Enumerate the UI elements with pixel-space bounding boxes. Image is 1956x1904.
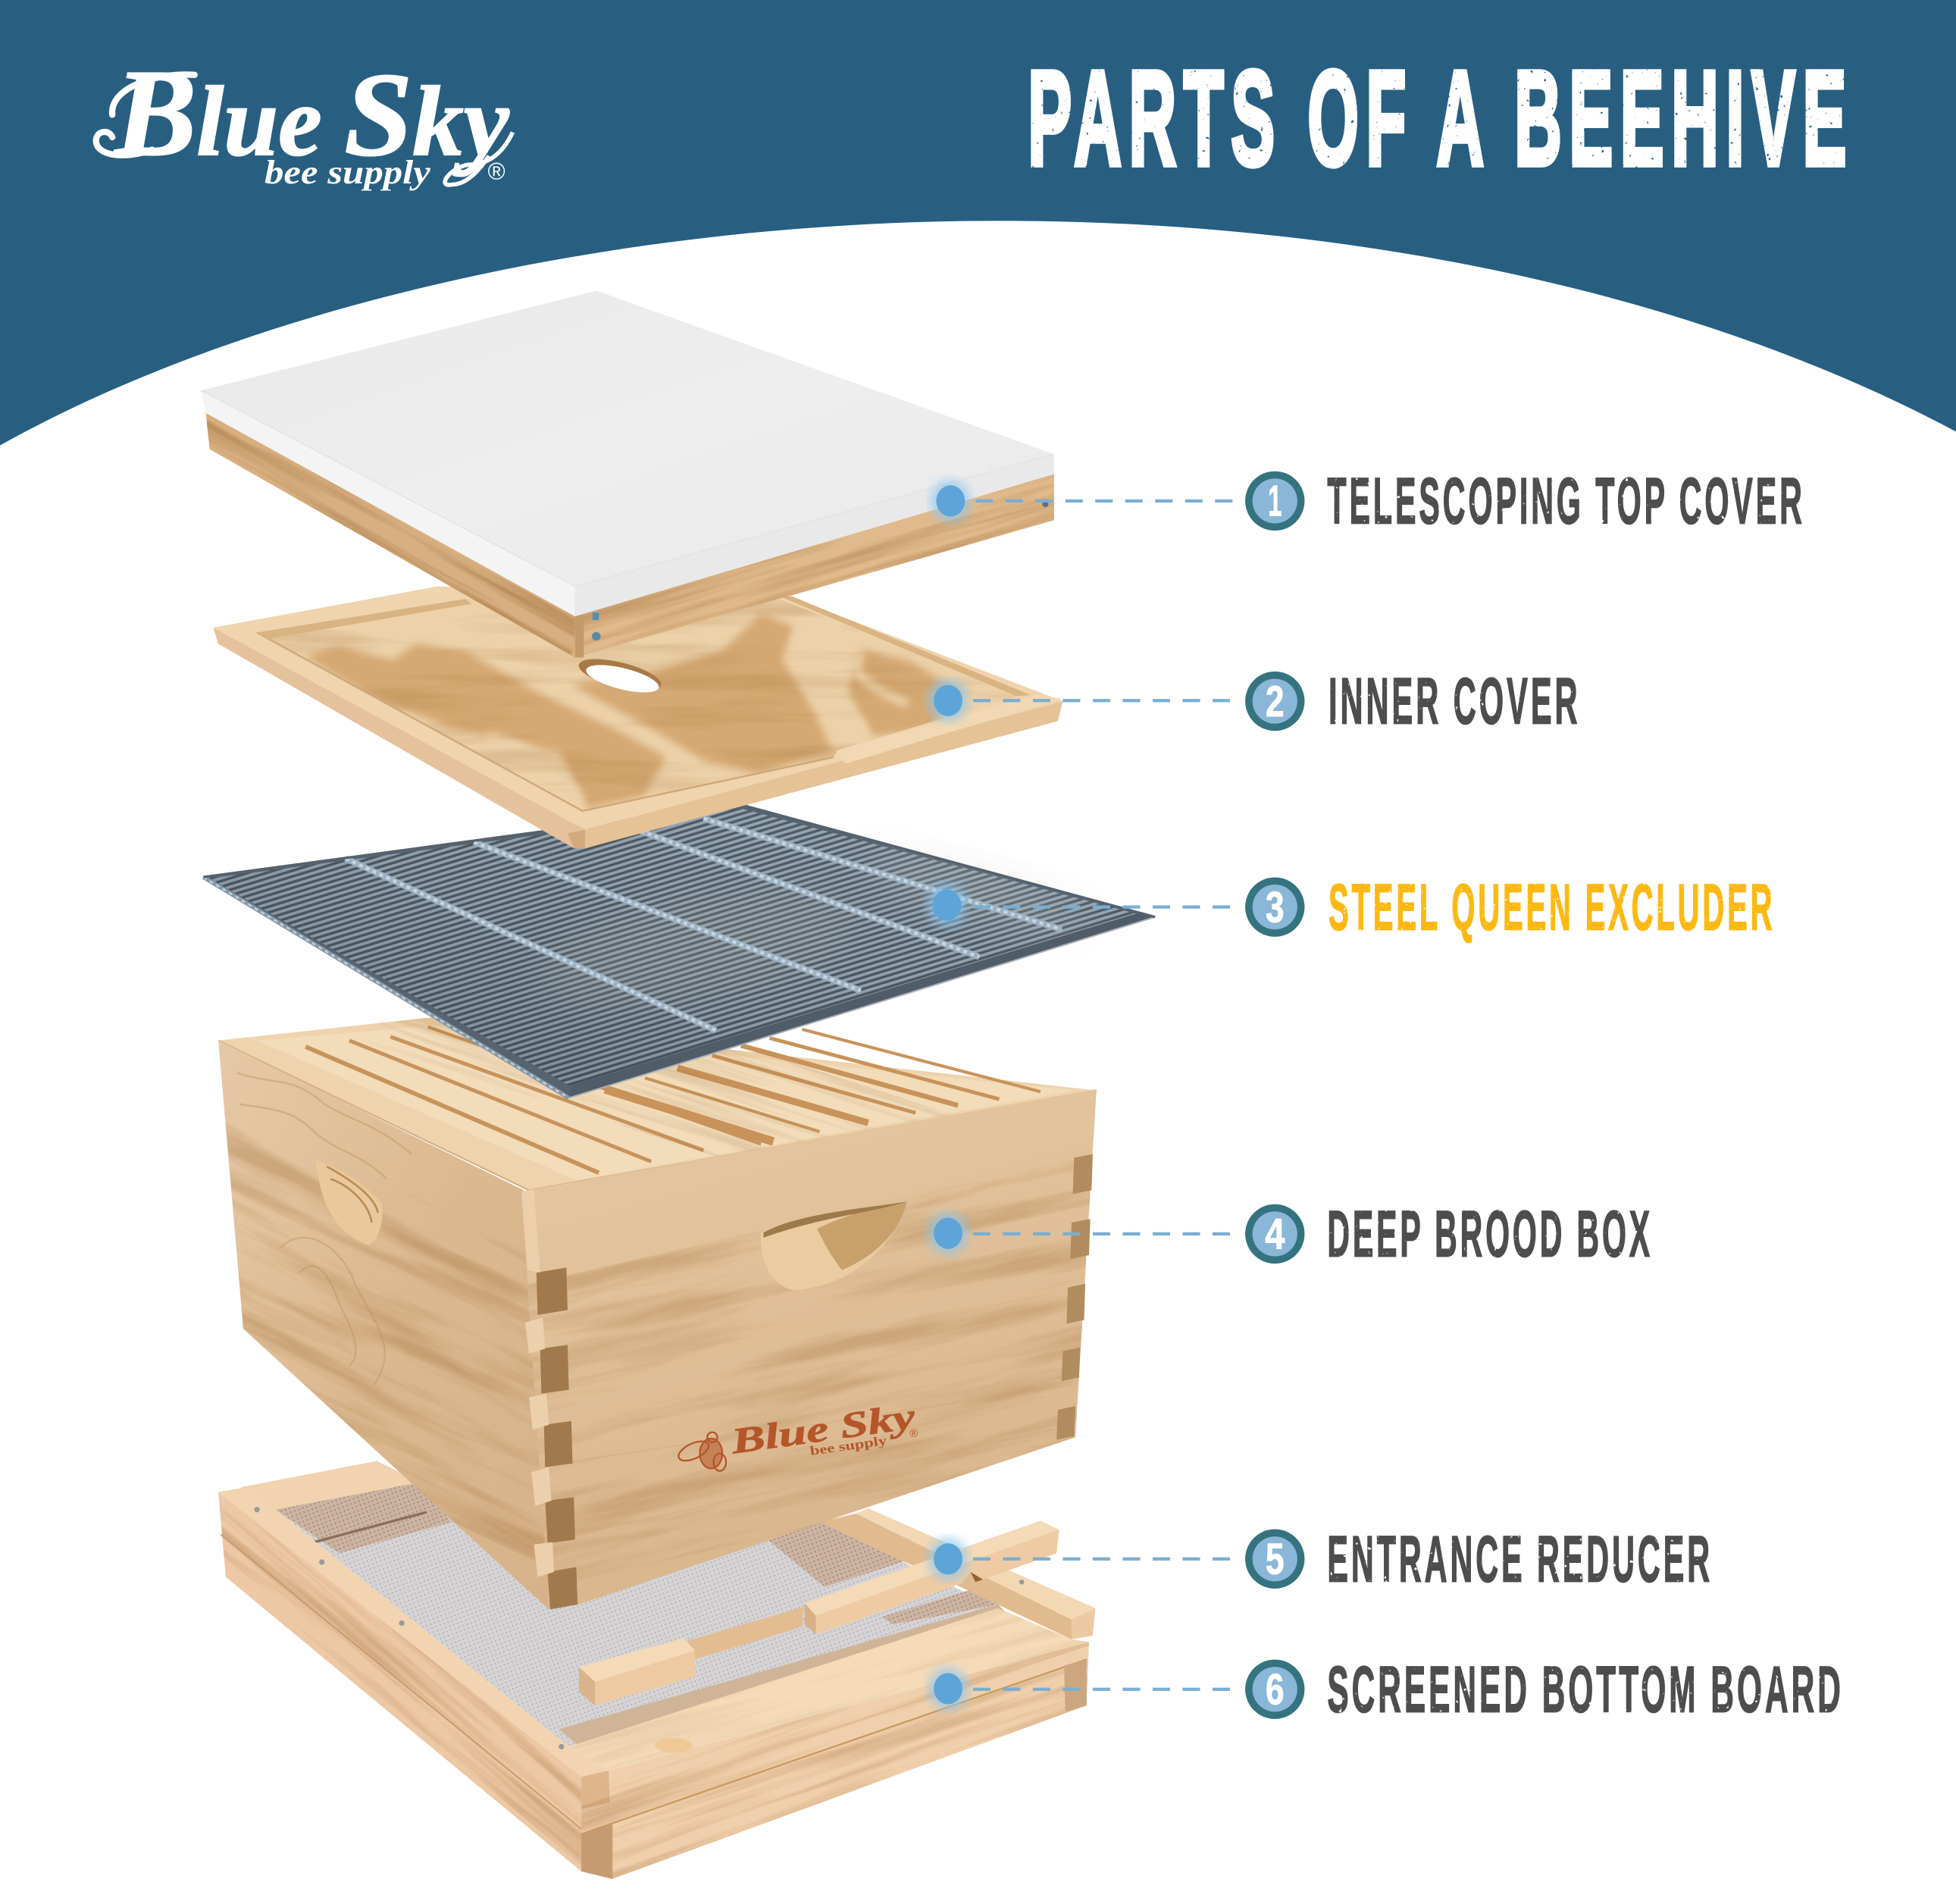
- icon: bee: [676, 1433, 726, 1471]
- box left face: [218, 1041, 549, 1609]
- exploded beehive illustration: [108, 291, 1155, 1899]
- callout 4: deep brood box: 4: [1265, 1210, 1285, 1259]
- box front face: [521, 1089, 1097, 1609]
- logo: Blue Sky bee supply: ®: [488, 158, 505, 185]
- part 4: deep brood box: [108, 918, 1154, 1609]
- logo: Blue Sky bee supply: Blue: [113, 43, 322, 182]
- callout 6: screened bottom board: 6: [1266, 1665, 1285, 1714]
- part 6: screened bottom board: [218, 1461, 1096, 1879]
- oval feed hole: [576, 653, 664, 698]
- callout 4: deep brood box: [928, 1198, 1653, 1271]
- callout 3: steel queen excluder: [927, 871, 1775, 944]
- part 3: steel queen excluder: [203, 805, 1155, 1098]
- logo: Blue Sky bee supply: Sky: [344, 49, 509, 181]
- callout rows: [927, 465, 1844, 1726]
- finger joints: [537, 1154, 1093, 1609]
- callout 2: inner cover: [928, 665, 1581, 738]
- callout 5: entrance reducer: [928, 1523, 1713, 1596]
- box branding: Blue Sky: [728, 1396, 919, 1462]
- callout rows: INNER COVER: [1329, 665, 1581, 738]
- box branding: ®: [909, 1427, 919, 1440]
- logo: Blue Sky bee supply: [96, 43, 513, 191]
- part 1: telescoping top cover: [173, 291, 1073, 669]
- callout 5: entrance reducer: 5: [1266, 1535, 1285, 1583]
- logo: Blue Sky bee supply: bee supply: [264, 153, 430, 191]
- front hand hold: [761, 1201, 907, 1290]
- callout 6: screened bottom board: [928, 1653, 1844, 1726]
- left hand hold: [315, 1160, 382, 1245]
- callout 1: telescoping top cover: 1: [1268, 478, 1282, 526]
- part 2: inner cover: [213, 587, 1062, 848]
- box branding: bee supply: [809, 1433, 888, 1458]
- callout 3: steel queen excluder: 3: [1266, 883, 1285, 932]
- box branding: [676, 1396, 919, 1471]
- callout 2: inner cover: 2: [1266, 678, 1285, 726]
- part 5: entrance reducer: [579, 1521, 1059, 1705]
- callout 1: telescoping top cover: [931, 465, 1805, 538]
- header band with curved edge: [0, 0, 1956, 446]
- box top with frames: [218, 1017, 1097, 1190]
